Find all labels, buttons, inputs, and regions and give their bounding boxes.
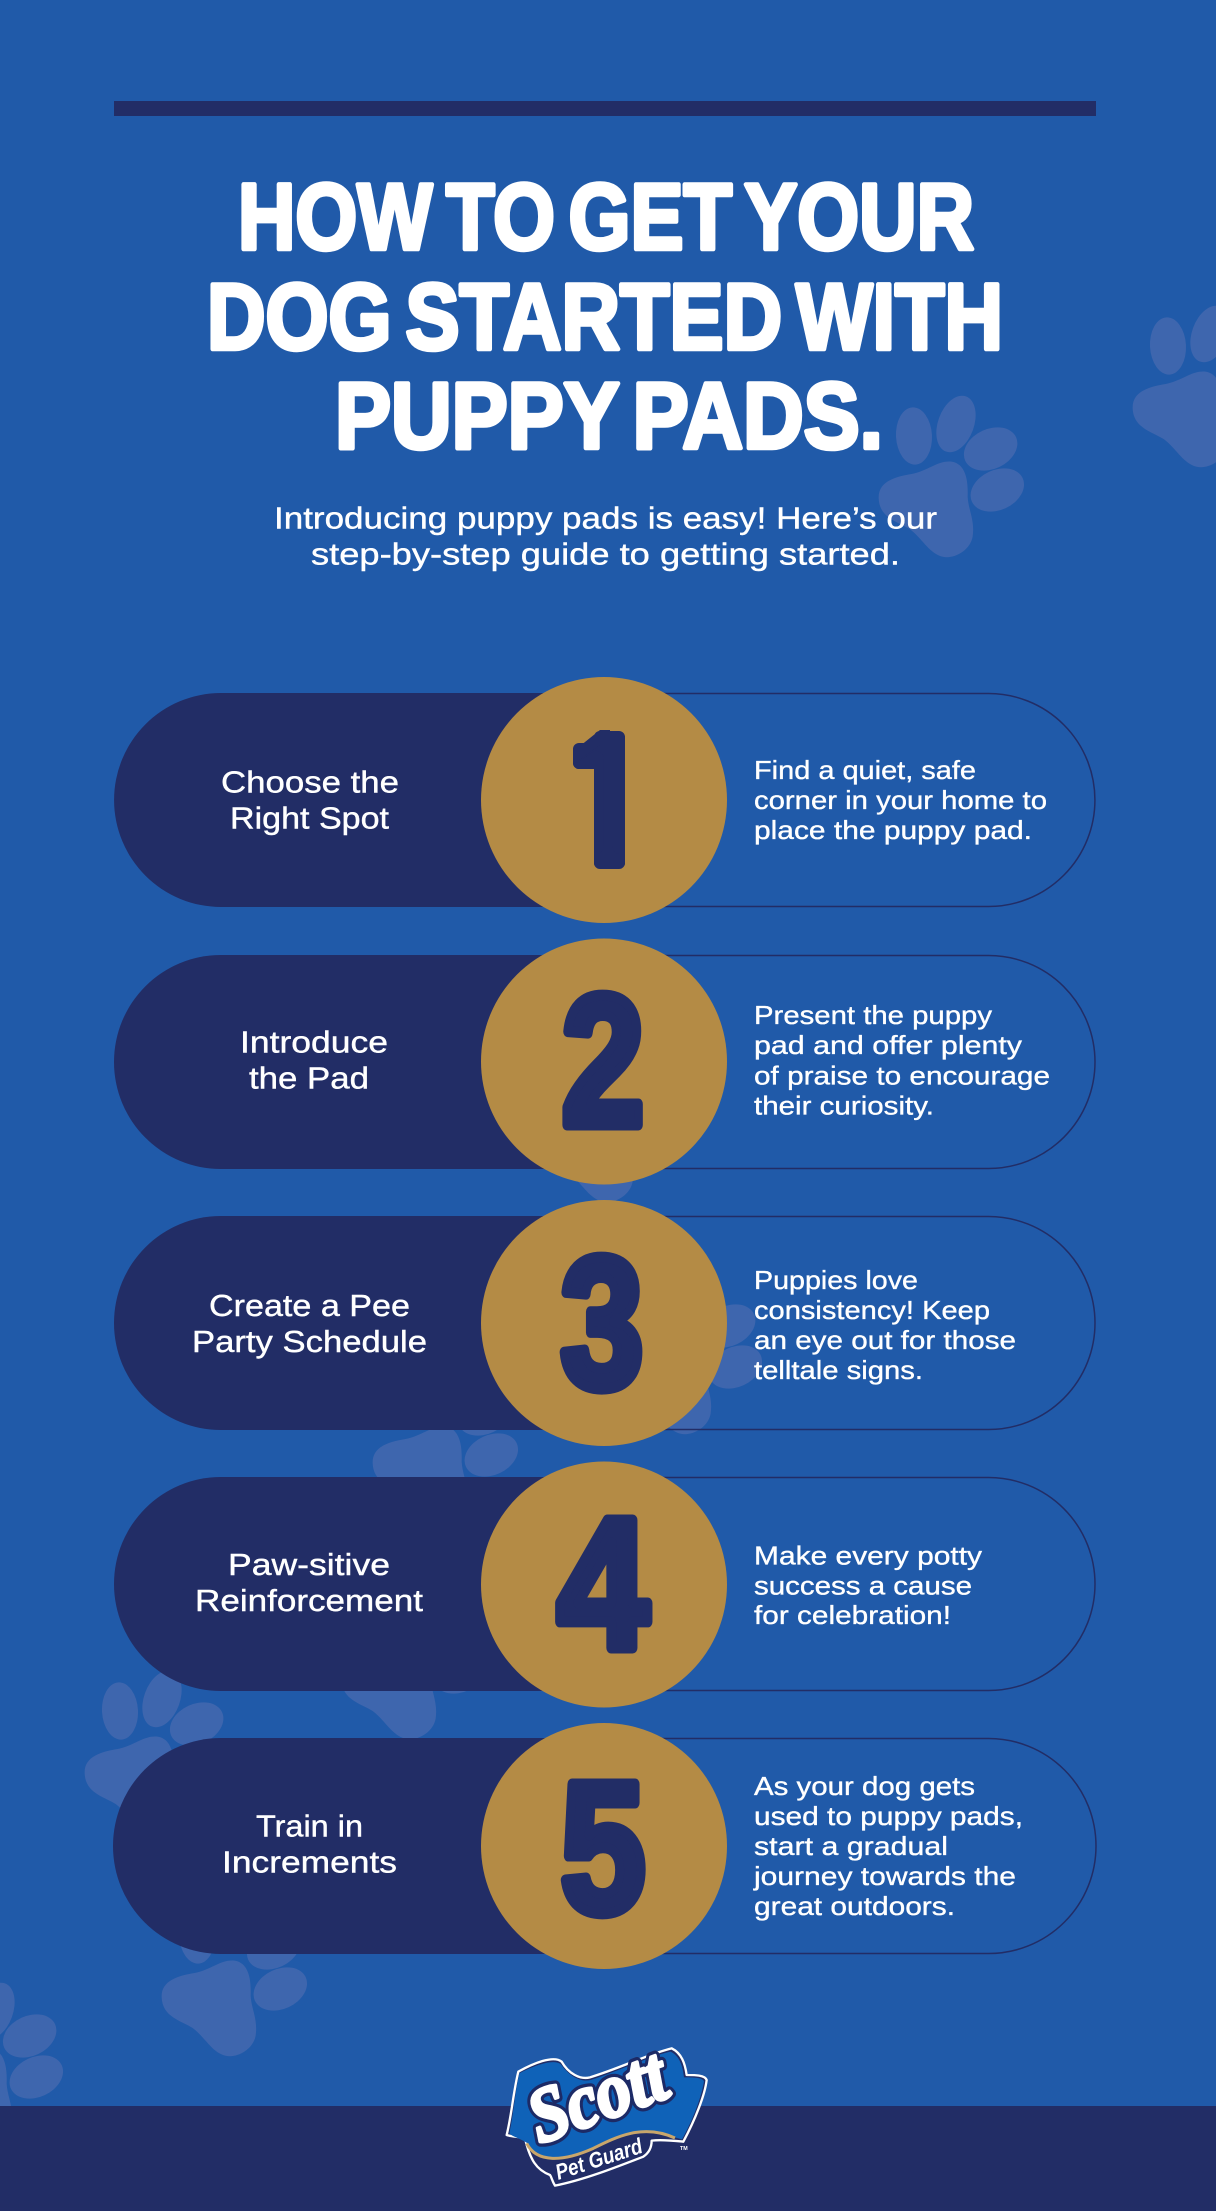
- step 2 right outlined pill: [604, 956, 1095, 1168]
- step 5 heading: [222, 1808, 397, 1880]
- step 1 heading: [221, 764, 399, 836]
- step 5 number: 5: [561, 1745, 645, 1952]
- step 2 left filled pill: [114, 955, 604, 1169]
- step 3 description: an eye out for those: [754, 1325, 1016, 1355]
- title: HOW TO GET YOUR: [238, 164, 974, 269]
- step 2 description: [754, 1000, 1050, 1120]
- step 2 description: pad and offer plenty: [754, 1030, 1022, 1060]
- step 1 left filled pill: [114, 693, 604, 907]
- step 1: [114, 677, 1095, 923]
- step 5 description: start a gradual: [754, 1831, 948, 1861]
- title: [207, 164, 1003, 468]
- step 3 left filled pill: [114, 1216, 604, 1430]
- subtitle: [274, 500, 937, 572]
- subtitle: step-by-step guide to getting started.: [311, 536, 900, 572]
- step 3 circle: [481, 1200, 727, 1446]
- logo wordmark: Scott: [516, 2030, 680, 2160]
- step 3 heading: Create a Pee: [209, 1288, 410, 1323]
- step 3 right outlined pill: [604, 1216, 1095, 1430]
- step 2 circle: [481, 938, 727, 1184]
- trademark: TM: [680, 2146, 688, 2152]
- step 5 description: [753, 1771, 1023, 1921]
- logo outer outline: [507, 2048, 707, 2186]
- step 4 heading: [195, 1547, 423, 1618]
- step 1 description: Find a quiet, safe: [754, 755, 976, 785]
- step 3 heading: Party Schedule: [192, 1324, 427, 1359]
- step 5 description: journey towards the: [753, 1861, 1016, 1891]
- step 4 left filled pill: [114, 1477, 604, 1691]
- step 2 heading: the Pad: [249, 1060, 369, 1096]
- logo: Scott Pet Guard: [507, 2030, 707, 2186]
- step 5: [113, 1723, 1096, 1969]
- step 3 description: consistency! Keep: [754, 1295, 990, 1325]
- step 1 circle: [481, 677, 727, 923]
- step 4 heading: Paw-sitive: [228, 1547, 390, 1582]
- step 5 circle: [481, 1723, 727, 1969]
- step 4 description: [754, 1540, 982, 1630]
- step 3: [114, 1200, 1095, 1446]
- step 2 description: Present the puppy: [754, 1000, 992, 1030]
- logo blue banner: [509, 2052, 704, 2158]
- step 4 circle: [481, 1462, 727, 1708]
- footer band: [0, 2106, 1216, 2211]
- step 5 heading: Increments: [222, 1844, 397, 1880]
- step 2 description: of praise to encourage: [754, 1060, 1050, 1090]
- step 5 right outlined pill: [604, 1738, 1096, 1954]
- step 5 heading: Train in: [256, 1808, 363, 1844]
- logo gold swoosh: [527, 2132, 675, 2158]
- step 5 description: As your dog gets: [754, 1771, 975, 1801]
- step 5 description: great outdoors.: [754, 1891, 955, 1921]
- step 1 heading: Choose the: [221, 764, 399, 800]
- step 4 number: 4: [557, 1480, 649, 1688]
- step 2 description: their curiosity.: [754, 1090, 934, 1120]
- step 5 left filled pill: [113, 1738, 604, 1954]
- step 5 description: used to puppy pads,: [754, 1801, 1023, 1831]
- title: DOG STARTED WITH: [207, 264, 1003, 369]
- step 1 description: [754, 755, 1047, 845]
- step 3 description: Puppies love: [754, 1265, 918, 1295]
- step 2 heading: Introduce: [240, 1024, 388, 1060]
- step 1 heading: Right Spot: [230, 800, 389, 836]
- step 1 description: corner in your home to: [754, 785, 1047, 815]
- step 4: [114, 1462, 1095, 1708]
- step 1 number: 1: [557, 698, 651, 905]
- logo sub-brand: Pet Guard: [552, 2133, 646, 2185]
- step 2 heading: [240, 1024, 388, 1096]
- step 2: [114, 938, 1095, 1184]
- step 4 heading: Reinforcement: [195, 1583, 423, 1618]
- logo wordmark fill: Scott: [516, 2030, 680, 2160]
- subtitle: Introducing puppy pads is easy! Here’s our: [274, 500, 937, 536]
- step 3 number: 3: [561, 1219, 643, 1427]
- step 1 description: place the puppy pad.: [754, 815, 1032, 845]
- step 4 description: for celebration!: [754, 1600, 951, 1630]
- step 1 right outlined pill: [604, 694, 1095, 906]
- step 4 right outlined pill: [604, 1478, 1095, 1690]
- step 3 description: [754, 1265, 1016, 1385]
- title: PUPPY PADS.: [335, 363, 883, 468]
- top bar: [114, 101, 1096, 116]
- step 3 heading: [192, 1288, 427, 1359]
- step 4 description: success a cause: [754, 1570, 972, 1600]
- step 4 description: Make every potty: [754, 1540, 982, 1570]
- step 3 description: telltale signs.: [754, 1355, 923, 1385]
- step 2 number: 2: [562, 957, 644, 1165]
